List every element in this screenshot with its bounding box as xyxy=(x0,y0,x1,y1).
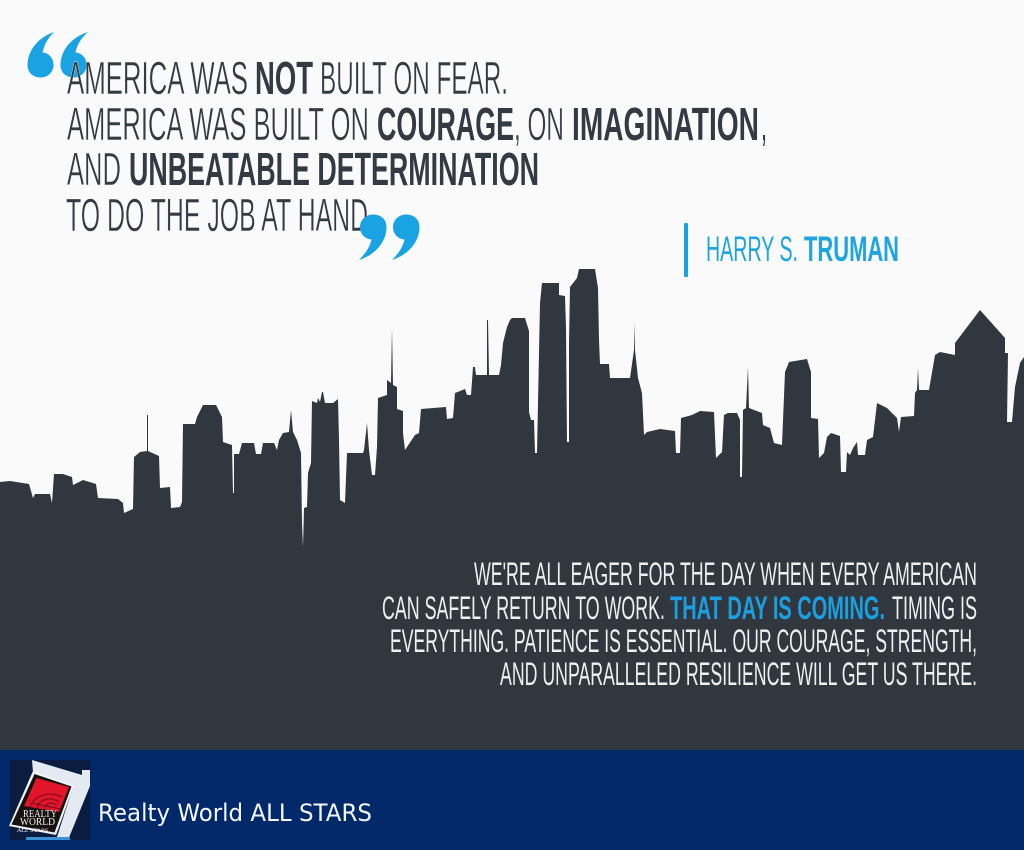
quotation text: AMERICA WAS BUILT ON xyxy=(67,98,369,150)
closing paragraph: CAN SAFELY RETURN TO WORK. xyxy=(382,590,665,626)
footer bar xyxy=(0,750,1024,850)
attribution: Harry S. Truman: HARRY S. xyxy=(706,230,798,269)
icon: opening quotation mark xyxy=(28,32,88,78)
quotation text: NOT xyxy=(255,52,313,104)
logo: Realty World All Stars sign: ALL STARS xyxy=(16,828,48,834)
attribution: Harry S. Truman xyxy=(684,223,899,277)
quotation text: COURAGE xyxy=(377,98,514,150)
quotation text: AMERICA WAS xyxy=(67,52,248,104)
quotation text: UNBEATABLE DETERMINATION xyxy=(129,143,539,195)
logo: Realty World All Stars sign xyxy=(9,760,90,840)
closing paragraph xyxy=(382,556,977,692)
logo: Realty World All Stars sign: WORLD xyxy=(20,816,55,828)
quotation text: BUILT ON FEAR. xyxy=(320,52,508,104)
attribution: Harry S. Truman: TRUMAN xyxy=(804,230,899,269)
icon: closing quotation mark xyxy=(359,214,420,260)
quotation text xyxy=(66,52,767,241)
quotation text: AND xyxy=(67,143,121,195)
closing paragraph: THAT DAY IS COMING. xyxy=(670,590,885,626)
logo: Realty World All Stars sign: REALTY xyxy=(23,808,57,820)
infographic canvas: , xyxy=(761,98,767,150)
quotation text: IMAGINATION xyxy=(572,98,759,150)
quotation text: , ON xyxy=(514,98,564,150)
footer business name: Realty World ALL STARS xyxy=(98,799,372,827)
quotation text: TO DO THE JOB AT HAND. xyxy=(66,189,375,241)
city skyline silhouette xyxy=(0,269,1024,750)
